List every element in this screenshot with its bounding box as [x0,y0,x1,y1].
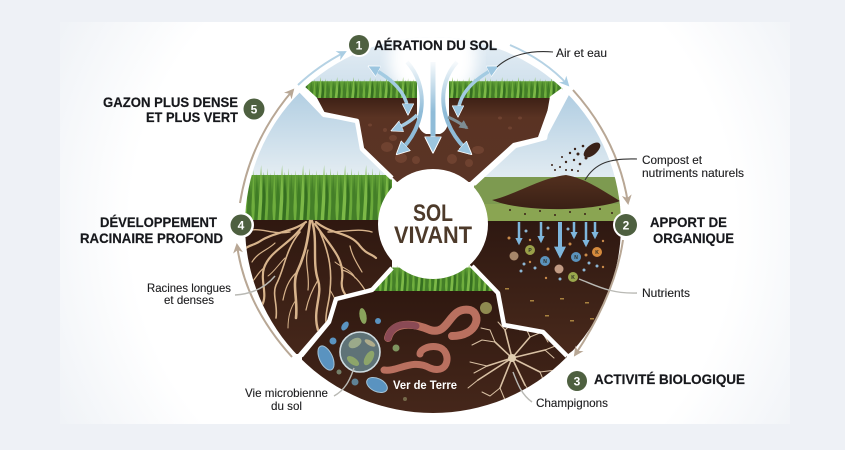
step 5: gazon plus dense et plus vert: 5 [251,102,258,116]
soil specks [505,288,594,322]
callout: racines longues et denses: Racines longues [147,281,231,295]
centre circle: VIVANT [394,222,472,249]
panel: développement racinaire et gazon [245,92,392,354]
step 1: aération du sol: 1 [356,38,363,52]
centre circle [378,169,488,279]
step 3: activité biologique: ACTIVITÉ BIOLOGIQUE [594,371,745,387]
step 4: développement racinaire profond: DÉVELOPPEMENT [100,214,217,230]
callout: champignons [513,372,608,410]
step 2: apport de organique [613,212,734,246]
step 2: apport de organique: ORGANIQUE [653,230,734,246]
step 4: développement racinaire profond: 4 [238,218,245,232]
callout: compost et nutriments naturels: nutriments naturels [642,166,744,180]
nutrient particles: N [574,255,578,261]
microbes [315,302,492,401]
callout: compost et nutriments naturels [585,153,744,180]
centre circle: SOL [413,200,453,227]
step 4: développement racinaire profond [80,212,254,246]
earthworm upper [388,310,476,338]
callout: nutrients [579,279,690,300]
step 2: apport de organique: APPORT DE [650,214,727,230]
step 5: gazon plus dense et plus vert: ET PLUS VERT [146,109,238,125]
step 1: aération du sol [347,33,497,57]
panel: aération du sol [305,40,563,182]
callout: champignons: Champignons [536,396,608,410]
air arrows [370,62,497,153]
step 2: apport de organique: 2 [623,218,630,232]
nutrient arrows [519,222,595,255]
callout: vie microbienne du sol: du sol [271,399,302,413]
step 3: activité biologique: 3 [574,374,581,388]
cycle arrows [237,45,628,357]
scattered compost on grass [509,208,613,216]
callout: air et eau [497,46,607,67]
nutrient particles: P [528,248,532,254]
circular diagram [233,40,632,413]
step 5: gazon plus dense et plus vert [103,94,264,125]
callout: vie microbienne du sol: Vie microbienne [245,386,328,400]
compost particles [551,142,600,172]
callout: racines longues et denses: et denses [164,293,214,307]
step 5: gazon plus dense et plus vert: GAZON PLUS DENSE [103,94,238,110]
microscope lens [340,332,380,372]
callout: vie microbienne du sol [245,368,354,413]
compost pile [492,175,620,209]
step 4: développement racinaire profond: RACINAIRE PROFOND [80,230,223,246]
nutrient particles: K [595,250,599,256]
callout: nutrients: Nutrients [642,286,690,300]
nutrient particles: K [571,275,575,281]
callout: racines longues et denses [147,276,275,307]
white gutters between panels [301,88,567,356]
nutrient particles: N [543,259,547,265]
callout: compost et nutriments naturels: Compost et [642,153,703,167]
step 1: aération du sol: AÉRATION DU SOL [374,37,497,53]
earthworm clitellum [388,325,416,338]
label: ver de terre: Ver de Terre [393,378,457,392]
callout: air et eau: Air et eau [556,46,607,60]
mycelium [468,322,562,400]
step 3: activité biologique [565,369,745,393]
panel: apport organique [470,95,621,354]
earthworm lower [384,347,447,370]
panel: activité biologique [300,262,570,421]
roots [246,221,376,330]
nutrient particles [508,226,604,282]
